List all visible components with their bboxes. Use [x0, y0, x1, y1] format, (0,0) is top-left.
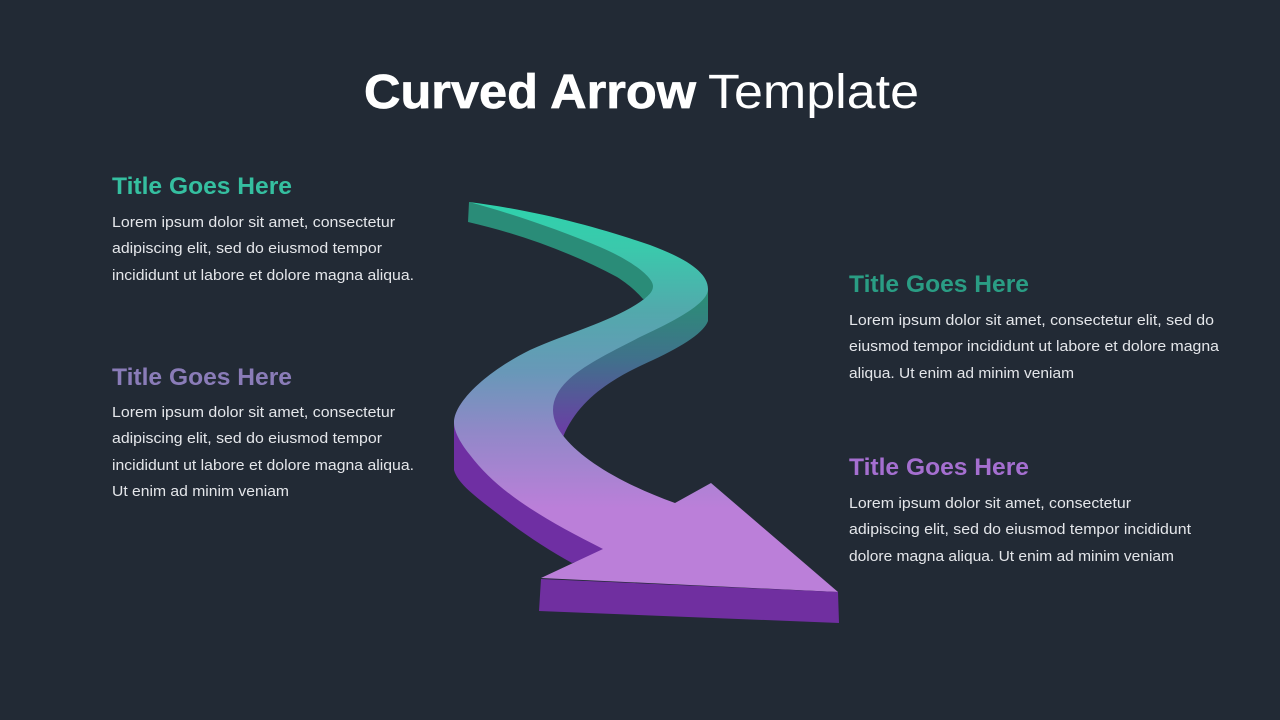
arrow top surface — [454, 202, 838, 592]
text block: bottom right: Title Goes Here — [849, 454, 1029, 481]
text block: top right: eiusmod tempor incididunt ut labore et dolore magna — [849, 338, 1220, 355]
text block: top right: aliqua. Ut enim ad minim veniam — [849, 365, 1074, 382]
text block: bottom left: Ut enim ad minim veniam — [112, 483, 289, 500]
text block: bottom right: adipiscing elit, sed do eiusmod tempor incididunt — [849, 521, 1192, 538]
text block: top left: incididunt ut labore et dolore magna aliqua. — [112, 267, 414, 284]
title: Template — [708, 66, 919, 119]
text block: top right — [849, 271, 1220, 382]
text block: top left: Lorem ipsum dolor sit amet, consectetur — [112, 214, 395, 231]
text block: bottom right: dolore magna aliqua. Ut enim ad minim veniam — [849, 548, 1174, 565]
text block: top right: Lorem ipsum dolor sit amet, consectetur elit, sed do — [849, 312, 1214, 329]
arrow inner teal wall — [468, 202, 665, 299]
text block: bottom left: Lorem ipsum dolor sit amet, consectetur — [112, 404, 395, 421]
title — [364, 66, 919, 119]
text block: bottom left: incididunt ut labore et dolore magna aliqua. — [112, 457, 414, 474]
title: Curved Arrow — [364, 66, 697, 119]
text block: top left: adipiscing elit, sed do eiusmod tempor — [112, 240, 382, 257]
arrow head front face — [539, 579, 839, 623]
text block: bottom left — [112, 364, 414, 500]
text block: top left — [112, 173, 414, 284]
text block: top left: Title Goes Here — [112, 173, 292, 200]
text block: bottom right: Lorem ipsum dolor sit amet, consectetur — [849, 495, 1131, 512]
curved 3D arrow — [454, 202, 839, 623]
arrow left side wall — [454, 422, 610, 563]
arrow right side wall — [540, 289, 708, 437]
text block: bottom right — [849, 454, 1192, 565]
text block: bottom left: Title Goes Here — [112, 364, 292, 391]
text block: bottom left: adipiscing elit, sed do eiusmod tempor — [112, 430, 382, 447]
text block: top right: Title Goes Here — [849, 271, 1029, 298]
